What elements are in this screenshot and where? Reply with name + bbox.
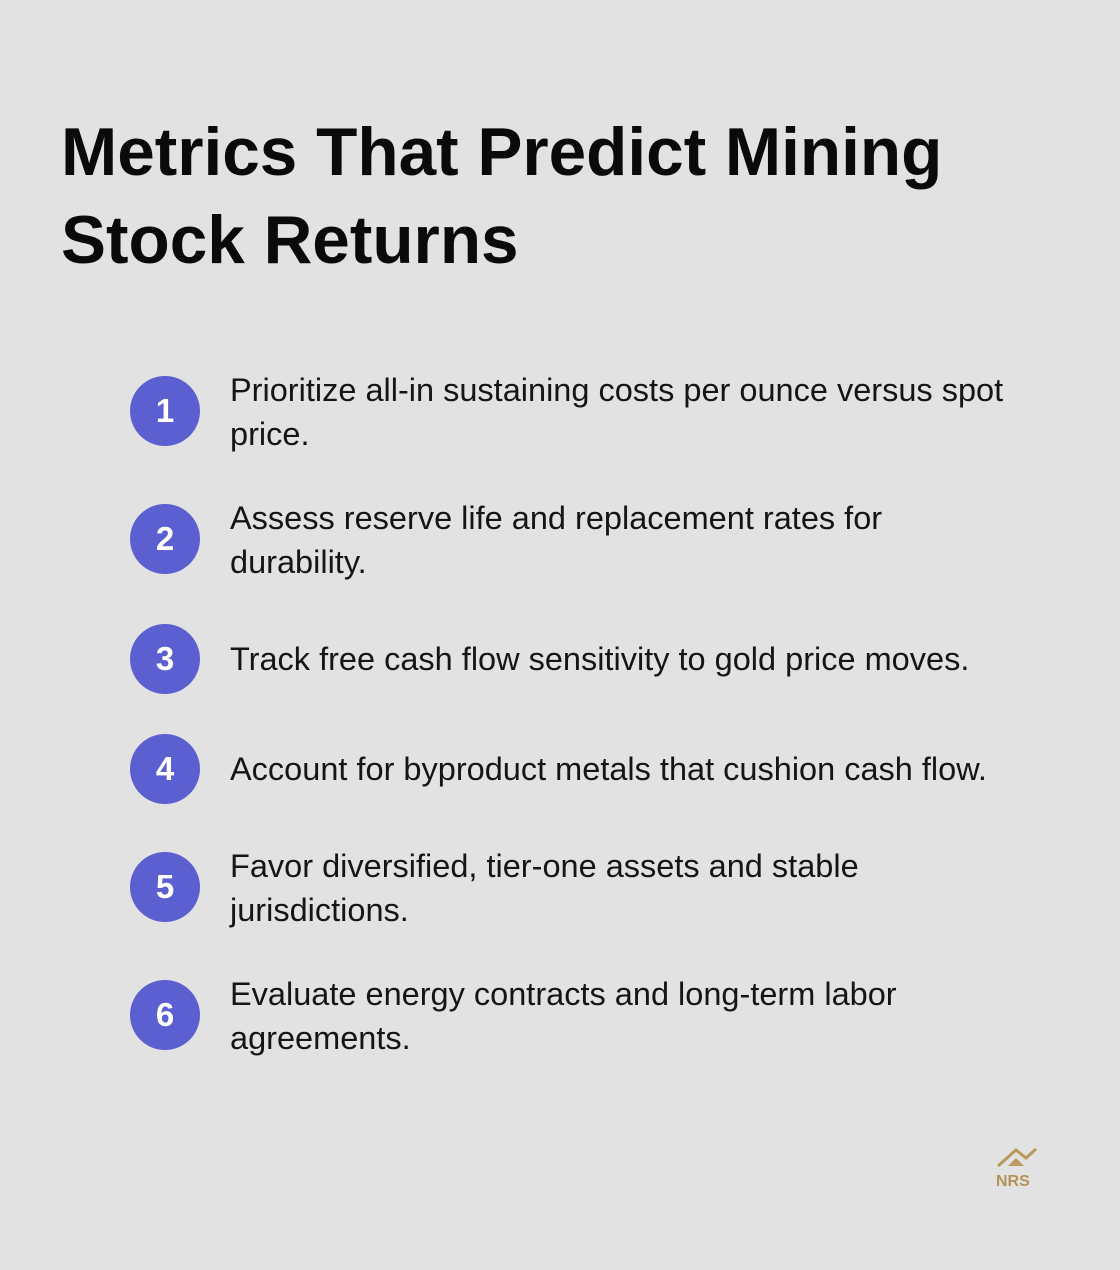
item 5: jurisdictions.	[230, 892, 409, 928]
logo: NRS	[996, 1173, 1030, 1190]
item 3: 3	[156, 640, 174, 677]
logo	[996, 1148, 1037, 1190]
item 4: Account for byproduct metals that cushion cash flow.	[230, 751, 987, 787]
title	[61, 115, 942, 278]
item 1	[130, 372, 1003, 452]
item 2: durability.	[230, 544, 367, 580]
item 1: Prioritize all-in sustaining costs per ounce versus spot	[230, 372, 1003, 408]
item 6: agreements.	[230, 1020, 411, 1056]
item 5: Favor diversified, tier-one assets and stable	[230, 848, 859, 884]
title: Stock Returns	[61, 203, 519, 278]
item 2: 2	[156, 520, 174, 557]
item 6: Evaluate energy contracts and long-term labor	[230, 976, 897, 1012]
item 3: Track free cash flow sensitivity to gold price moves.	[230, 641, 969, 677]
item 6	[130, 976, 897, 1056]
title: Metrics That Predict Mining	[61, 115, 942, 190]
item 1: price.	[230, 416, 309, 452]
item 4: 4	[156, 750, 174, 787]
item 5: 5	[156, 868, 174, 905]
item 4	[130, 734, 987, 804]
item 5	[130, 848, 859, 928]
item 6: 6	[156, 996, 174, 1033]
item 1: 1	[156, 392, 174, 429]
item 3	[130, 624, 969, 694]
item 2: Assess reserve life and replacement rates for	[230, 500, 882, 536]
item 2	[130, 500, 882, 580]
